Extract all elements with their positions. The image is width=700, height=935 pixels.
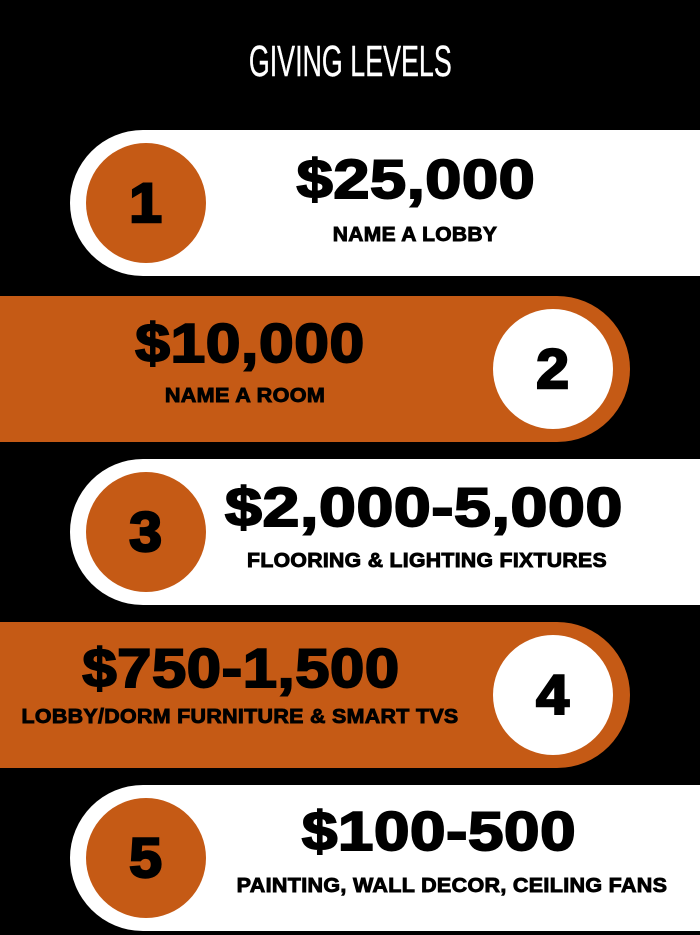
panel: level 4	[0, 622, 630, 768]
icon: number 3	[86, 472, 206, 592]
amount 2: $10,000	[135, 312, 365, 374]
amount 1: $25,000	[297, 148, 535, 210]
icon: number 4	[493, 635, 613, 755]
icon: number 2	[493, 309, 613, 429]
label 1: NAME A LOBBY	[333, 224, 497, 246]
amount 3: $2,000-5,000	[225, 476, 623, 538]
icon: number 5	[86, 798, 206, 918]
panel: level 3	[70, 459, 700, 605]
panel: level 5	[70, 785, 700, 931]
icon: number 3: 3	[130, 500, 162, 563]
label 3: FLOORING & LIGHTING FIXTURES	[247, 550, 607, 572]
icon: number 1	[86, 143, 206, 263]
icon: number 2: 2	[537, 337, 569, 400]
label 4: LOBBY/DORM FURNITURE & SMART TVS	[21, 706, 459, 728]
title: GIVING LEVELS	[249, 37, 451, 86]
label 2: NAME A ROOM	[165, 385, 325, 407]
panel: level 2	[0, 296, 630, 442]
amount 4: $750-1,500	[82, 637, 400, 699]
panel: level 1	[70, 130, 700, 276]
icon: number 4: 4	[537, 663, 569, 726]
amount 5: $100-500	[302, 800, 576, 862]
label 5: PAINTING, WALL DECOR, CEILING FANS	[237, 875, 667, 897]
icon: number 1: 1	[130, 171, 162, 234]
icon: number 5: 5	[130, 826, 162, 889]
